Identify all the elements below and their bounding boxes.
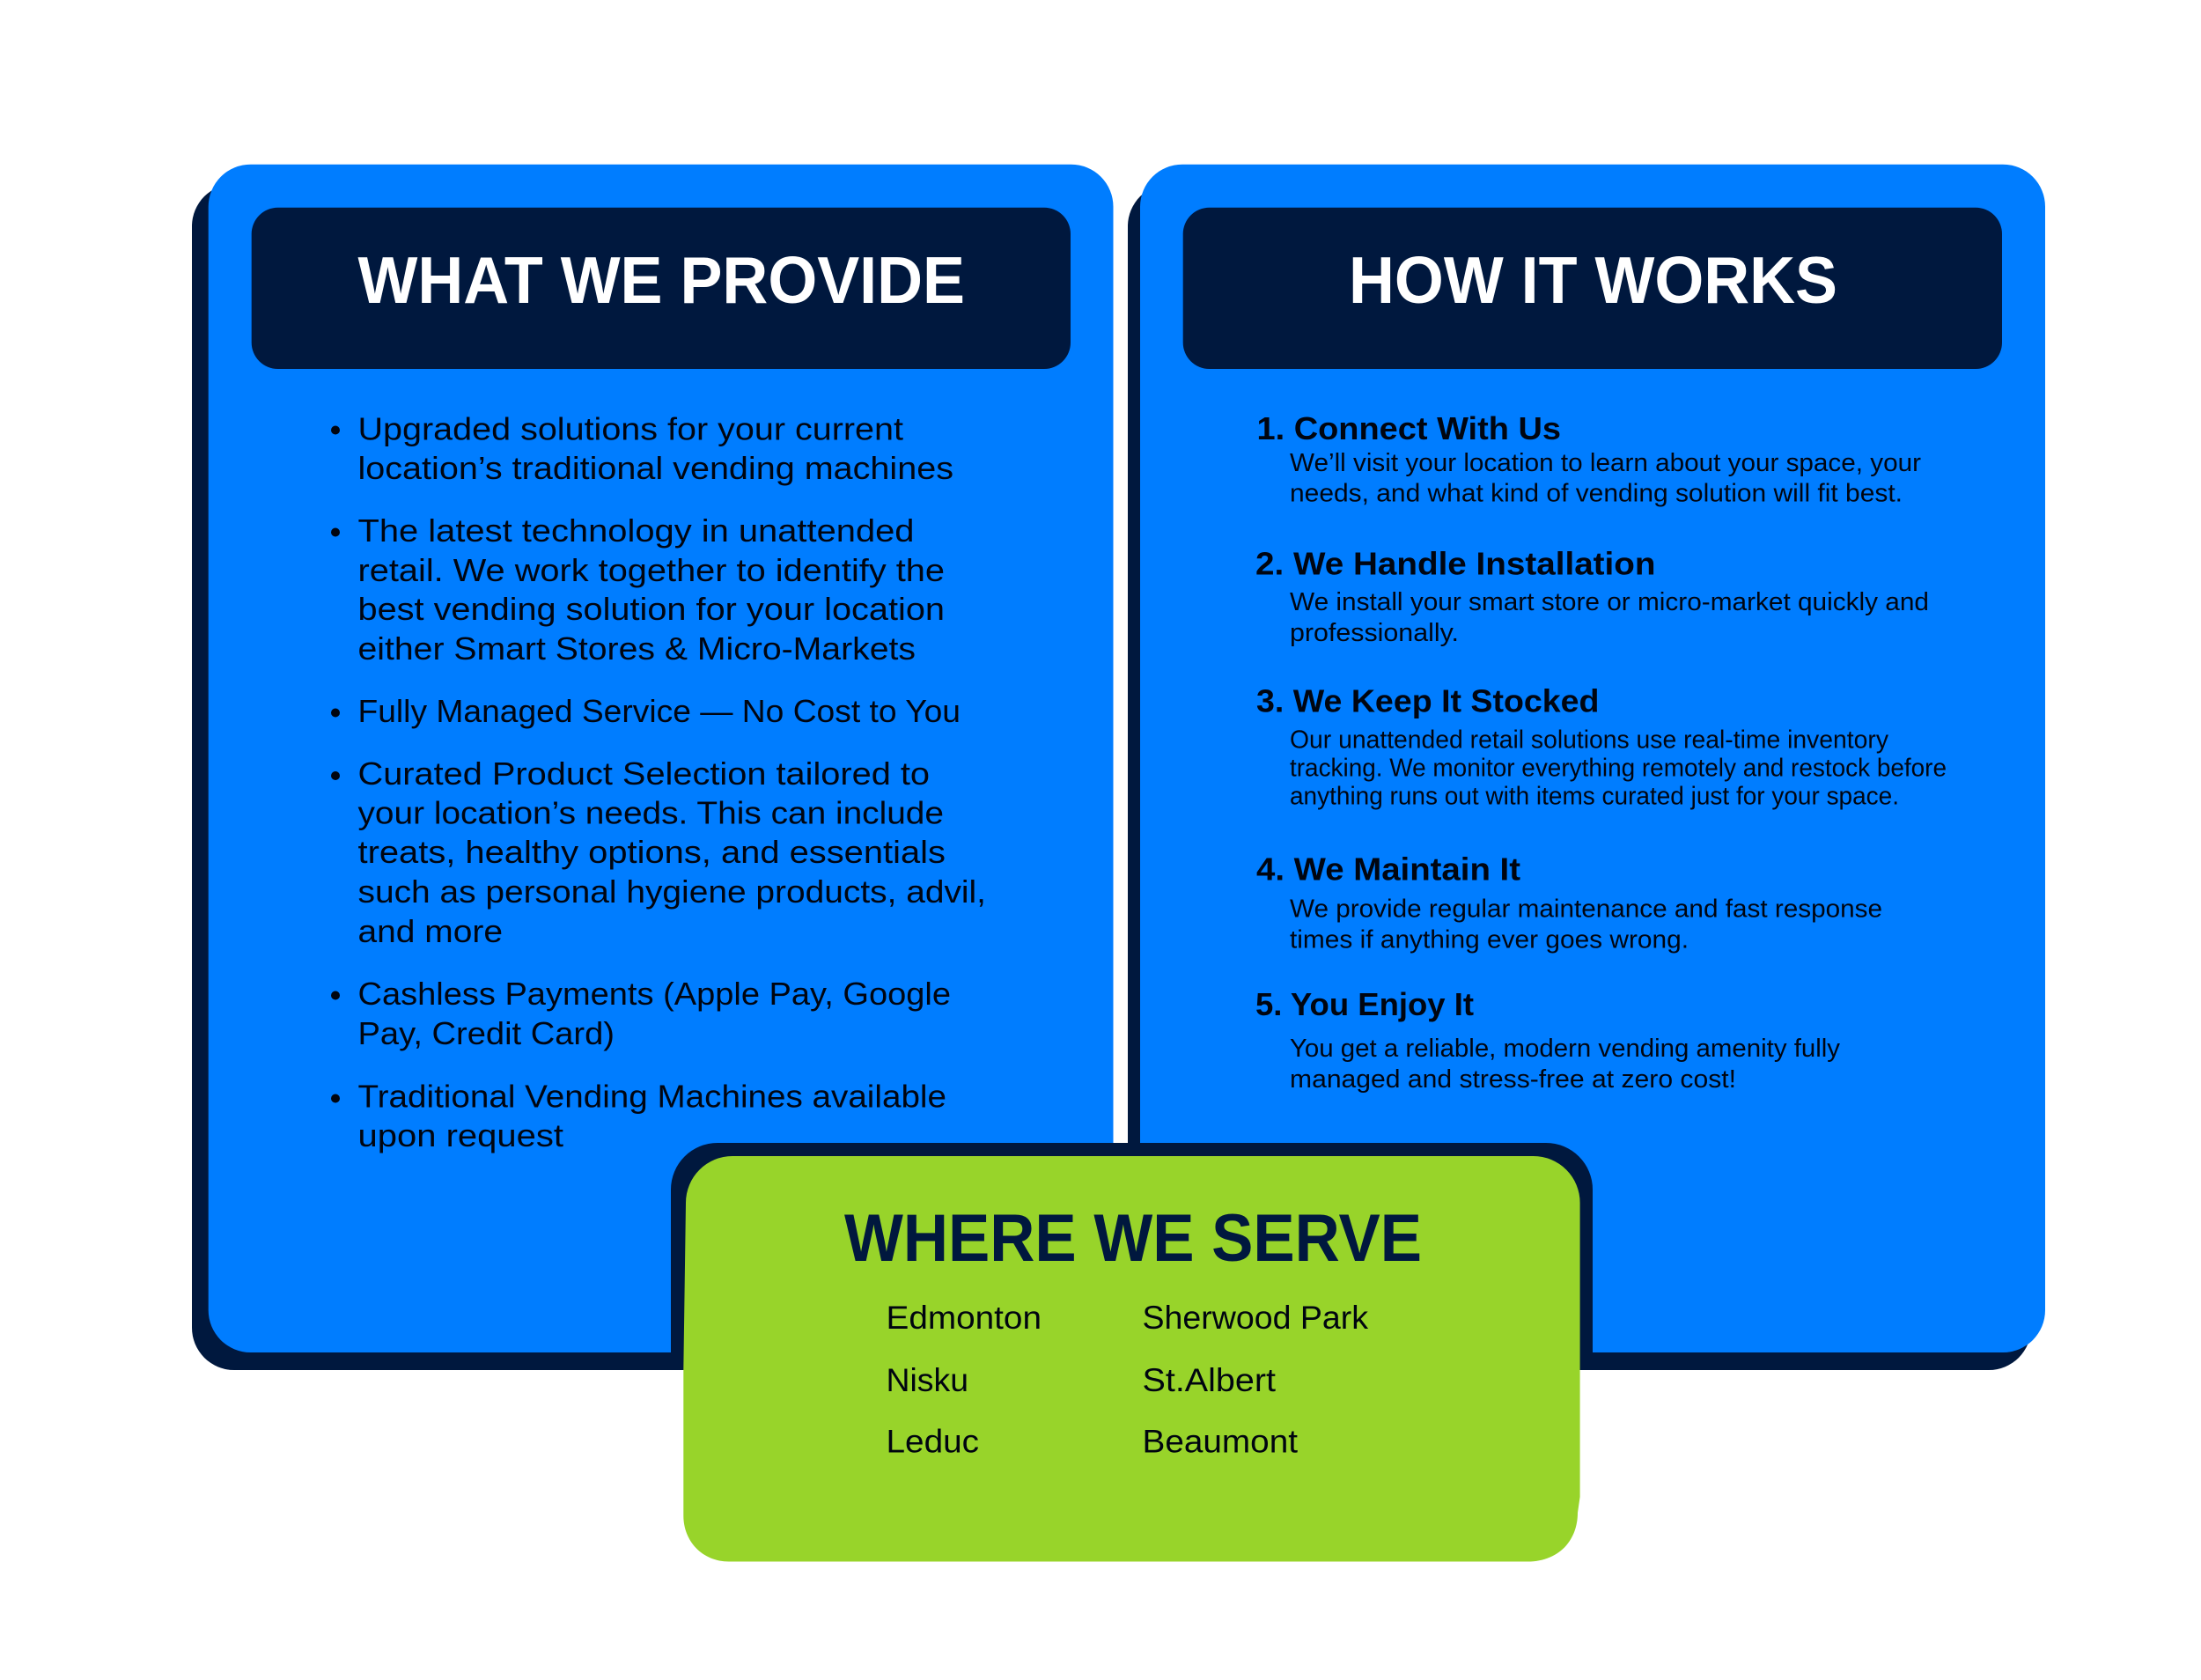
- step 1: [1257, 410, 1922, 507]
- step 4: 4. We Maintain It: [1256, 851, 1520, 888]
- step 1: We’ll visit your location to learn about your space, your: [1290, 449, 1922, 477]
- panel: where we serve: [671, 1143, 1593, 1562]
- heading: what we provide: WHAT WE PROVIDE: [357, 243, 965, 317]
- panel backing: left dark shadow: [192, 184, 1108, 1370]
- bullet list: services: upon request: [357, 1117, 563, 1153]
- step 4: [1256, 851, 1882, 954]
- bullet list: services: Fully Managed Service — No Cost to You: [357, 693, 961, 729]
- bullet list: services: [331, 410, 986, 1153]
- step 5: 5. You Enjoy It: [1255, 986, 1474, 1022]
- bullet list: services: treats, healthy options, and essentials: [357, 834, 946, 870]
- heading: how it works: HOW IT WORKS: [1349, 243, 1837, 317]
- panel: what we provide: [209, 165, 1114, 1352]
- step 5: [1255, 986, 1841, 1094]
- bullet list: services: such as personal hygiene products, advil,: [357, 873, 986, 910]
- city list: Nisku: [886, 1362, 968, 1398]
- step 1: needs, and what kind of vending solution will fit best.: [1290, 479, 1903, 507]
- city list: Leduc: [886, 1423, 979, 1460]
- heading: how it works: [1183, 208, 2002, 369]
- step 3: anything runs out with items curated just for your space.: [1290, 782, 1899, 810]
- bullet list: services: your location’s needs. This can include: [357, 794, 944, 831]
- step 2: 2. We Handle Installation: [1255, 546, 1655, 581]
- city list: Beaumont: [1143, 1423, 1299, 1460]
- bullet list: services: Curated Product Selection tailored to: [357, 755, 930, 792]
- bullet list: services: Pay, Credit Card): [357, 1015, 615, 1051]
- bullet list: services: either Smart Stores & Micro-Markets: [357, 630, 916, 667]
- bullet list: services: retail. We work together to identify the: [357, 552, 945, 588]
- bullet list: services: Traditional Vending Machines available: [357, 1078, 946, 1115]
- bullet list: services: and more: [357, 913, 503, 949]
- step 1: 1. Connect With Us: [1257, 410, 1561, 446]
- bullet list: services: The latest technology in unattended: [357, 512, 914, 549]
- bullet list: services: location’s traditional vending machines: [357, 450, 953, 486]
- step 4: We provide regular maintenance and fast response: [1290, 895, 1882, 923]
- heading: where we serve: WHERE WE SERVE: [844, 1201, 1422, 1276]
- step 3: 3. We Keep It Stocked: [1256, 683, 1599, 718]
- step 5: managed and stress-free at zero cost!: [1290, 1065, 1736, 1094]
- step 2: We install your smart store or micro-market quickly and: [1290, 588, 1929, 616]
- step 3: [1256, 683, 1947, 810]
- bullet list: services: Upgraded solutions for your current: [357, 410, 903, 447]
- step 3: tracking. We monitor everything remotely and restock before: [1290, 754, 1947, 782]
- step 2: professionally.: [1290, 619, 1459, 647]
- step 5: You get a reliable, modern vending amenity fully: [1290, 1035, 1841, 1063]
- city list: St.Albert: [1143, 1362, 1277, 1398]
- step 3: Our unattended retail solutions use real-time inventory: [1290, 726, 1889, 754]
- panel: how it works: [1140, 165, 2045, 1352]
- heading: what we provide: [252, 208, 1071, 369]
- panel backing: right dark shadow: [1128, 184, 2031, 1370]
- step 4: times if anything ever goes wrong.: [1290, 926, 1689, 954]
- city list: Edmonton: [886, 1300, 1042, 1336]
- step 2: [1255, 546, 1929, 647]
- city list: Sherwood Park: [1143, 1300, 1369, 1336]
- bullet list: services: best vending solution for your location: [357, 591, 945, 627]
- bullet list: services: Cashless Payments (Apple Pay, Google: [357, 976, 951, 1012]
- city list: [886, 1300, 1369, 1460]
